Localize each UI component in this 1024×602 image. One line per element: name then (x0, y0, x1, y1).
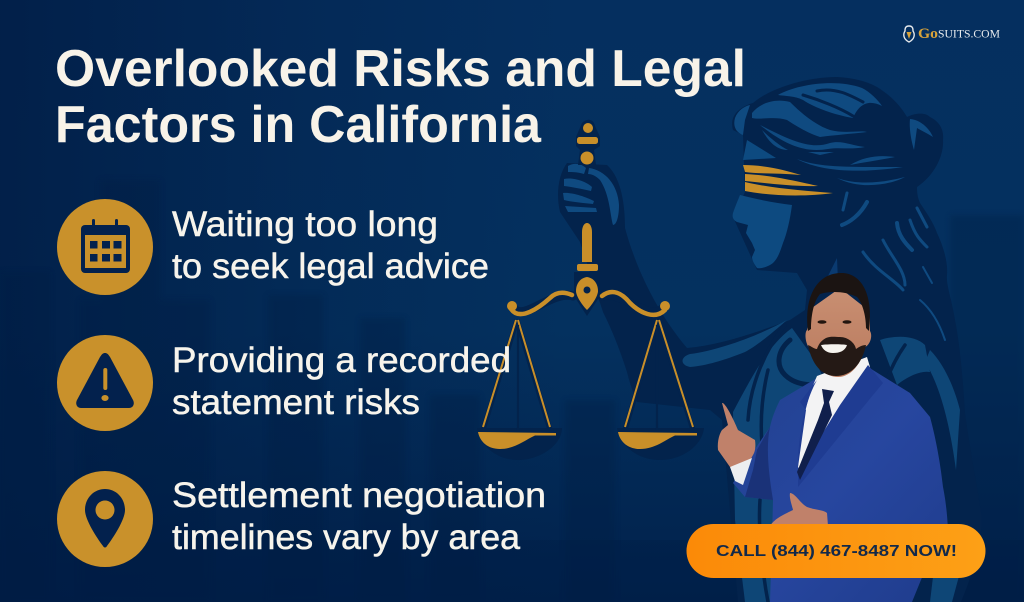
hair (807, 273, 870, 331)
item: recorded statement (57, 335, 511, 431)
lapels (798, 365, 883, 487)
pan shadows (477, 428, 704, 460)
beard (808, 337, 866, 376)
call to action button (686, 524, 986, 578)
pointing hand (718, 403, 755, 473)
logo: Go (918, 26, 938, 42)
logo: SUITS.COM (938, 26, 1000, 40)
title: Factors in California (55, 96, 542, 154)
sword handle outline (576, 120, 600, 165)
item: settlement timelines (57, 471, 546, 567)
blindfold (743, 165, 833, 195)
attorney portrait (718, 273, 948, 602)
text: to seek legal advice (172, 247, 489, 286)
sleeve shadow (745, 427, 773, 500)
logo (904, 26, 1000, 42)
call to action button: CALL (844) 467-8487 NOW! (716, 543, 957, 560)
icon: map pin (57, 471, 153, 567)
text: Providing a recorded (172, 341, 511, 380)
arm and drape highlights (682, 320, 962, 602)
text: Settlement negotiation (172, 476, 546, 515)
icon: warning triangle (57, 335, 153, 431)
smile (821, 344, 847, 353)
tie (797, 389, 834, 480)
shirt (798, 357, 870, 470)
text (172, 341, 511, 422)
hand fingers and thumb (563, 164, 619, 225)
text: Waiting too long (172, 205, 438, 244)
text (172, 476, 546, 557)
shirt cuff (730, 458, 752, 485)
title (55, 40, 746, 154)
item: waiting too long (57, 199, 489, 295)
suit (733, 367, 948, 602)
title: Overlooked Risks and Legal (55, 40, 746, 98)
scales of justice (477, 120, 704, 460)
text: timelines vary by area (172, 518, 521, 557)
icon: calendar (57, 199, 153, 295)
head (806, 273, 871, 377)
text: statement risks (172, 383, 420, 422)
neck gap (820, 258, 838, 292)
lower hand (770, 493, 828, 526)
silhouette (558, 77, 982, 602)
hair highlights (734, 83, 933, 185)
face (733, 140, 792, 268)
text (172, 205, 489, 286)
lady justice figure (477, 77, 982, 602)
